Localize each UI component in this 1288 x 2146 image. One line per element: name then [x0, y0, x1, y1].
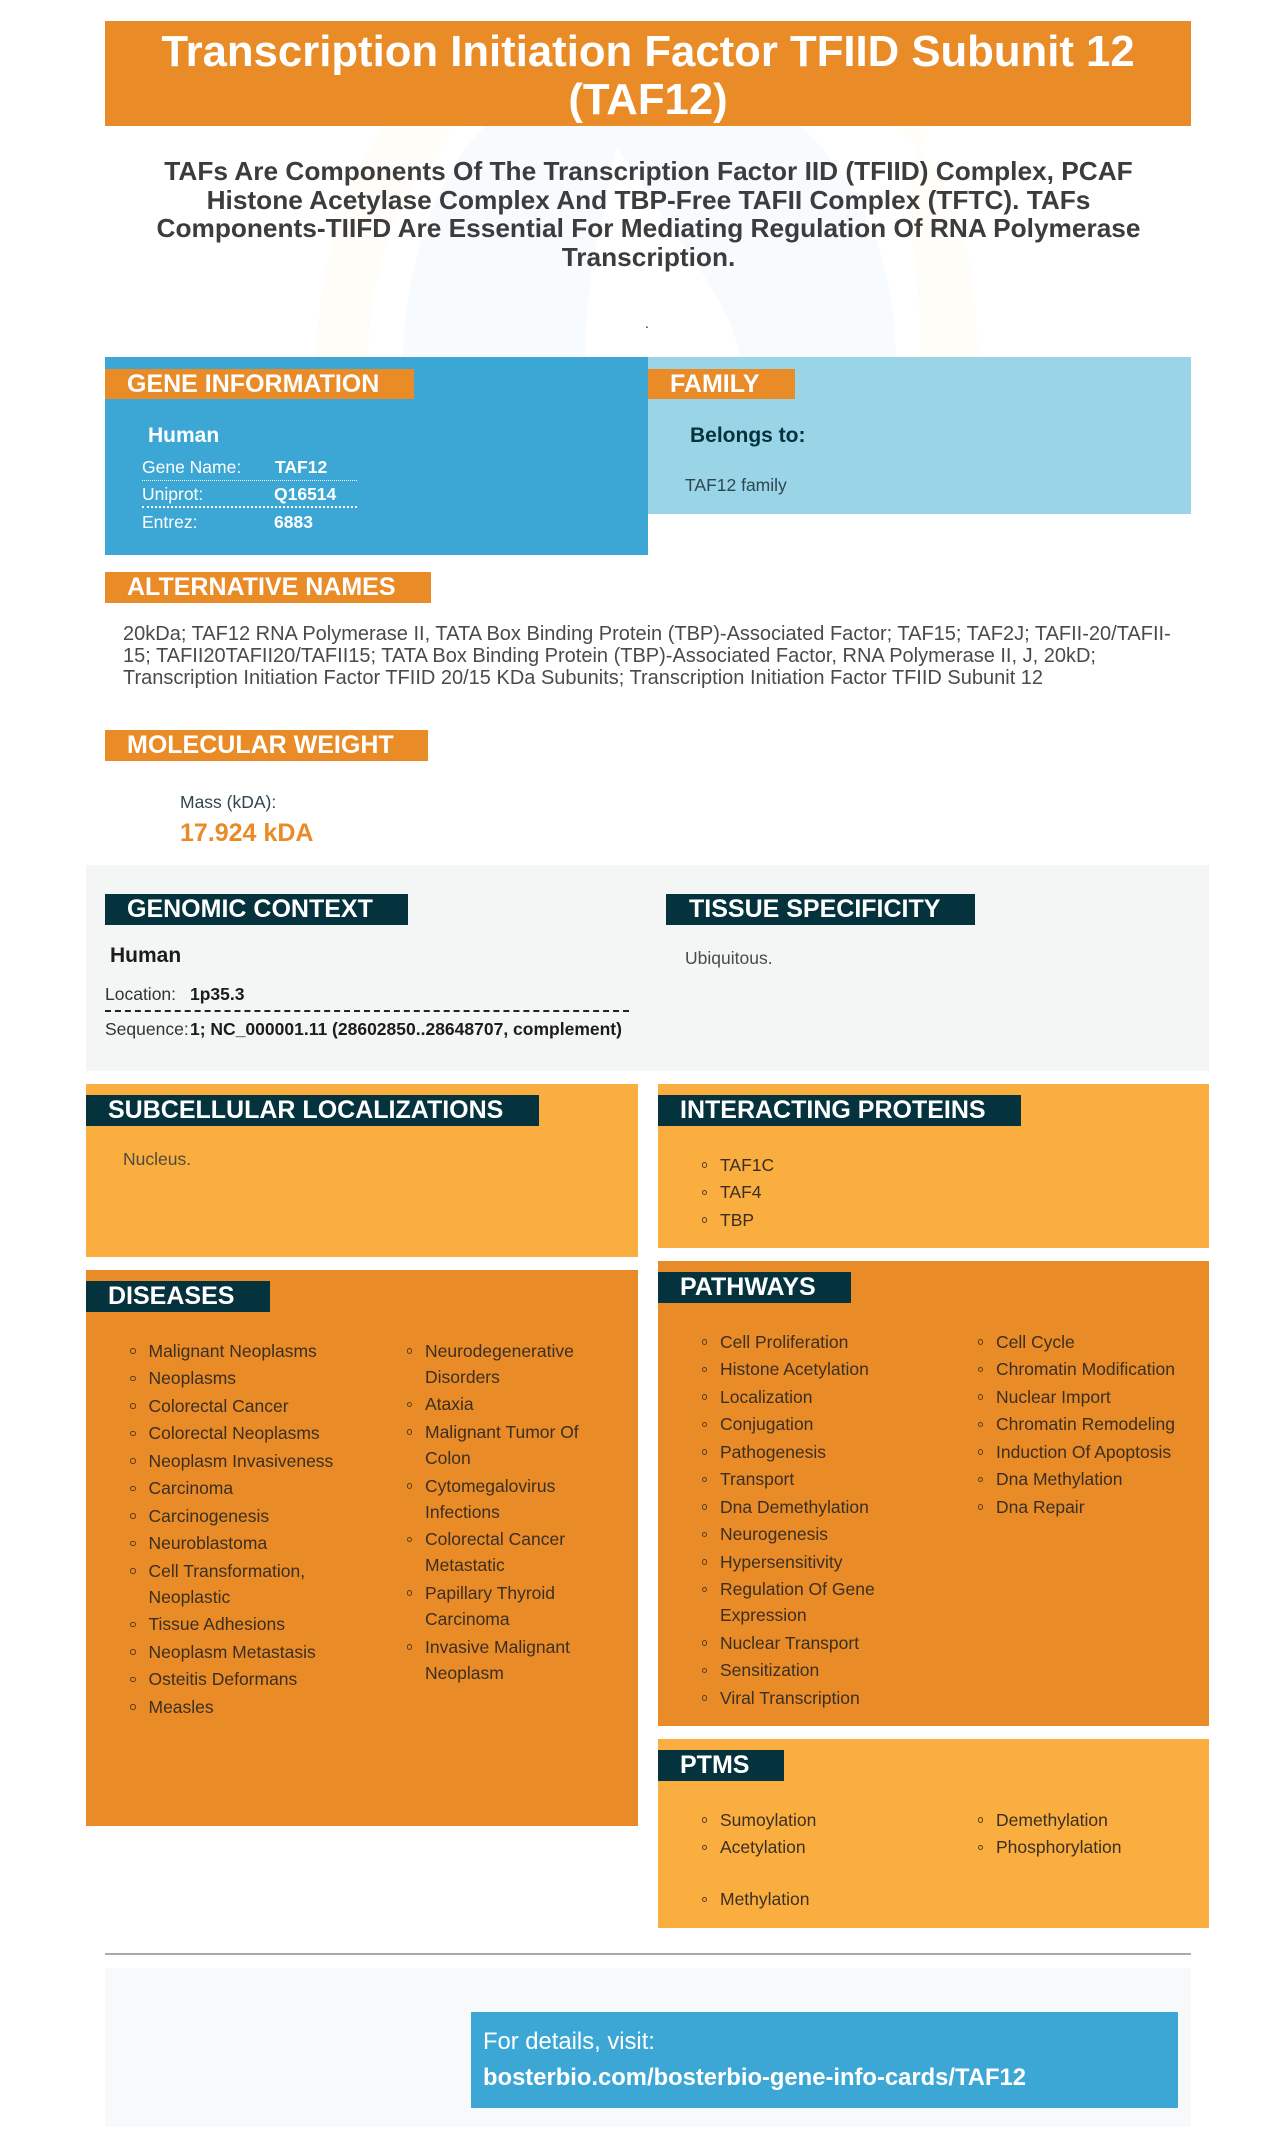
- intro text: [156, 156, 1141, 272]
- heading: ptms: PTMS: [680, 1751, 749, 1779]
- panel: diseases: [86, 1270, 638, 1826]
- pathway list column 1: Regulation Of Gene: [720, 1579, 875, 1599]
- disease list column 1: Carcinoma: [148, 1478, 233, 1498]
- ptm list column 1: [702, 1810, 816, 1909]
- pathway list column 1: Localization: [720, 1386, 812, 1406]
- protein list: TAF1C: [720, 1154, 774, 1174]
- panel: subcellular localizations: [86, 1084, 638, 1257]
- dot: .: [645, 315, 649, 331]
- pathway list column 2: Induction Of Apoptosis: [996, 1442, 1171, 1462]
- pathway list column 1: Viral Transcription: [720, 1688, 860, 1708]
- uniprot row: Q16514: [274, 484, 336, 504]
- title: Transcription Initiation Factor TFIID Subunit 12: [161, 27, 1135, 76]
- disease list column 2: Papillary Thyroid: [425, 1583, 555, 1603]
- disease list column 1: Colorectal Neoplasms: [148, 1423, 320, 1443]
- family value: TAF12 family: [685, 475, 787, 495]
- alternative names text: [123, 623, 1171, 689]
- pathway list column 1: Pathogenesis: [720, 1442, 826, 1462]
- disease list column 1: Neoplasm Invasiveness: [148, 1450, 333, 1470]
- sequence row: Sequence:: [105, 1018, 189, 1038]
- disease list column 2: Colorectal Cancer: [425, 1529, 565, 1549]
- callout: details link: [471, 2012, 1178, 2108]
- disease list column 2: Colon: [425, 1448, 471, 1468]
- disease list column 2: Disorders: [425, 1366, 500, 1386]
- disease list column 1: Tissue Adhesions: [148, 1614, 285, 1634]
- alternative names text: Transcription Initiation Factor TFIID 20/15 KDa Subunits; Transcription Initiation Factor TFIID Subunit 12: [123, 667, 1043, 689]
- uniprot row: [142, 482, 357, 508]
- pathway list column 1: Hypersensitivity: [720, 1552, 843, 1572]
- heading: alternative names: ALTERNATIVE NAMES: [127, 573, 396, 601]
- protein list: TBP: [720, 1210, 754, 1230]
- pathway list column 2: Dna Methylation: [996, 1469, 1122, 1489]
- pathway list column 1: Expression: [720, 1605, 807, 1625]
- belongs to: Belongs to:: [690, 424, 806, 447]
- disease list column 2: Neoplasm: [425, 1663, 504, 1683]
- disease list column 2: Neurodegenerative: [425, 1340, 574, 1360]
- gene name row: Gene Name:: [142, 456, 241, 476]
- heading: pathways: [658, 1272, 851, 1303]
- intro text: TAFs Are Components Of The Transcription Factor IID (TFIID) Complex, PCAF: [164, 156, 1133, 186]
- intro text: Components-TIIFD Are Essential For Mediating Regulation Of RNA Polymerase: [156, 213, 1141, 243]
- pathway list column 2: Cell Cycle: [996, 1332, 1075, 1352]
- disease list column 1: Measles: [148, 1696, 214, 1716]
- panel: footer: [105, 1968, 1191, 2127]
- callout url: bosterbio.com/bosterbio-gene-info-cards/TAF12: [483, 2064, 1026, 2091]
- panel: interacting proteins: [658, 1084, 1209, 1248]
- entrez row: 6883: [274, 512, 313, 532]
- ptm list column 1: Methylation: [720, 1889, 810, 1909]
- pathway list column 2: Chromatin Remodeling: [996, 1414, 1175, 1434]
- entrez row: [142, 512, 313, 532]
- heading: gene information: GENE INFORMATION: [127, 370, 379, 398]
- location row: [105, 982, 629, 1012]
- heading: pathways: PATHWAYS: [680, 1273, 816, 1301]
- panel: gene information: [105, 357, 648, 555]
- alternative names text: 20kDa; TAF12 RNA Polymerase II, TATA Box Binding Protein (TBP)-Associated Factor; TAF15; TAF2J; TAFII-20/TAFII-: [123, 623, 1171, 645]
- disease list column 1: Malignant Neoplasms: [148, 1340, 317, 1360]
- protein list: TAF4: [720, 1182, 762, 1202]
- pathway list column 1: Sensitization: [720, 1660, 819, 1680]
- disease list column 2: Cytomegalovirus: [425, 1476, 555, 1496]
- disease list column 1: Neoplasms: [148, 1368, 236, 1388]
- disease list column 1: Neoplasm Metastasis: [148, 1642, 316, 1662]
- heading: tissue specificity: TISSUE SPECIFICITY: [689, 895, 940, 923]
- ptm list column 1: Acetylation: [720, 1837, 806, 1857]
- panel: pathways: [658, 1261, 1209, 1726]
- heading: diseases: [86, 1281, 270, 1312]
- disease list column 1: Neoplastic: [148, 1586, 230, 1606]
- heading: ptms: [658, 1750, 784, 1781]
- disease list column 2: Malignant Tumor Of: [425, 1422, 579, 1442]
- heading: genomic context: GENOMIC CONTEXT: [127, 895, 373, 923]
- species: Human: [110, 944, 181, 967]
- pathway list column 1: Transport: [720, 1469, 794, 1489]
- callout label: For details, visit:: [483, 2028, 655, 2055]
- disease list column 2: Ataxia: [425, 1394, 474, 1414]
- pathway list column 1: Neurogenesis: [720, 1524, 828, 1544]
- disease list column 1: Neuroblastoma: [148, 1533, 267, 1553]
- intro text: Histone Acetylase Complex And TBP-Free TAFII Complex (TFTC). TAFs: [207, 185, 1090, 215]
- panel: genomic context and tissue specificity: [86, 865, 1209, 1071]
- sequence row: 1; NC_000001.11 (28602850..28648707, complement): [190, 1018, 622, 1038]
- disease list column 1: Cell Transformation,: [148, 1560, 305, 1580]
- intro text: Transcription.: [562, 242, 735, 272]
- pathway list column 1: [702, 1332, 875, 1708]
- species: Human: [148, 424, 219, 447]
- mass value: 17.924 kDA: [180, 819, 313, 847]
- tissue text: Ubiquitous.: [685, 948, 773, 968]
- pathway list column 1: Histone Acetylation: [720, 1359, 869, 1379]
- location row: 1p35.3: [190, 984, 244, 1004]
- background watermark: [0, 0, 1288, 560]
- disease list column 2: Invasive Malignant: [425, 1637, 570, 1657]
- heading: interacting proteins: INTERACTING PROTEINS: [680, 1096, 986, 1124]
- ptm list column 2: [978, 1810, 1122, 1857]
- pathway list column 1: Nuclear Transport: [720, 1632, 859, 1652]
- alternative names text: 15; TAFII20TAFII20/TAFII15; TATA Box Binding Protein (TBP)-Associated Factor, RNA Polymerase II, J, 20kD;: [123, 645, 1096, 667]
- disease list column 1: Carcinogenesis: [148, 1506, 269, 1526]
- protein list: [702, 1154, 774, 1230]
- disease list column 2: Carcinoma: [425, 1609, 510, 1629]
- heading: subcellular localizations: SUBCELLULAR LOCALIZATIONS: [108, 1096, 503, 1124]
- pathway list column 2: [978, 1332, 1175, 1516]
- heading: molecular weight: MOLECULAR WEIGHT: [127, 731, 394, 759]
- ptm list column 2: Phosphorylation: [996, 1837, 1122, 1857]
- location row: Location:: [105, 984, 176, 1004]
- panel: family: [648, 357, 1191, 514]
- pathway list column 1: Dna Demethylation: [720, 1496, 869, 1516]
- ptm list column 1: Sumoylation: [720, 1810, 816, 1830]
- gene name row: [142, 454, 357, 481]
- pathway list column 2: Dna Repair: [996, 1496, 1085, 1516]
- uniprot row: Uniprot:: [142, 484, 203, 504]
- disease list column 2: [407, 1340, 579, 1683]
- entrez row: Entrez:: [142, 512, 197, 532]
- disease list column 1: Osteitis Deformans: [148, 1669, 297, 1689]
- disease list column 2: Metastatic: [425, 1555, 505, 1575]
- heading: family: FAMILY: [670, 370, 759, 398]
- heading: family: [648, 369, 795, 399]
- disease list column 1: [130, 1340, 333, 1716]
- pathway list column 1: Conjugation: [720, 1414, 813, 1434]
- pathway list column 2: Nuclear Import: [996, 1386, 1111, 1406]
- localization text: Nucleus.: [123, 1148, 191, 1168]
- title: [105, 21, 1191, 126]
- mass label: Mass (kDA):: [180, 792, 276, 812]
- pathway list column 1: Cell Proliferation: [720, 1332, 848, 1352]
- panel: ptms: [658, 1739, 1209, 1928]
- pathway list column 2: Chromatin Modification: [996, 1359, 1175, 1379]
- ptm list column 2: Demethylation: [996, 1810, 1108, 1830]
- gene name row: TAF12: [275, 456, 327, 476]
- title: (TAF12): [568, 74, 728, 124]
- disease list column 2: Infections: [425, 1502, 500, 1522]
- disease list column 1: Colorectal Cancer: [148, 1396, 289, 1416]
- heading: diseases: DISEASES: [108, 1282, 234, 1310]
